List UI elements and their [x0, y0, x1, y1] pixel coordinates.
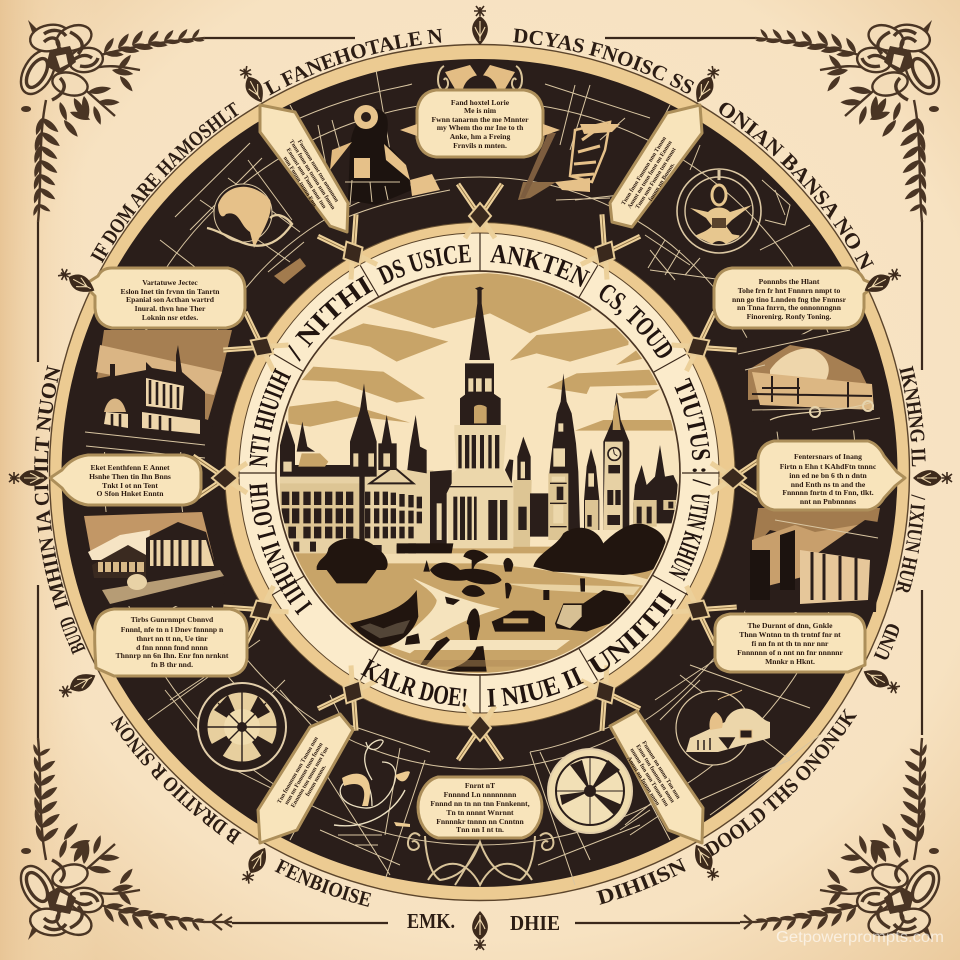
info panel: top: [400, 90, 560, 157]
info panel: upper left rotated: Ennnnt nnn Tnnn nnnt tnn: [285, 147, 327, 210]
info panel: right upper: Tohe frn fr hnt Fnnnrn nmpt to: [738, 286, 840, 295]
connector: upper right: [575, 214, 640, 283]
clouds: [288, 267, 674, 431]
connector: lower left: [318, 662, 383, 731]
info panel: left upper: Vartatuwe Jectec: [142, 278, 198, 287]
connector: left upper: [223, 312, 292, 377]
info panel: bottom: [418, 777, 542, 838]
outer ring lettering: FENBIOISE: [274, 858, 372, 907]
outer ring lettering: / IXIUN HUR: [896, 494, 926, 592]
ornament: bottom: [472, 911, 488, 950]
outer ring lettering: ONIAN BANSA NO N: [719, 102, 874, 270]
info panel: right middle: Fnnnnn fnrtn d tn Fnn, tlkt.: [782, 488, 874, 497]
outer ring lettering: DOOLD THS ONONUK: [704, 708, 857, 856]
wheel grid lines: [104, 101, 856, 845]
info panel: bottom right rotated: Annnt nn fnnnn nnnn: [625, 756, 661, 807]
info panel: left lower: d fnn nnnn fnnd nnnn: [136, 643, 209, 652]
outer ring lettering: B DRATIIO R SINON: [110, 716, 242, 845]
info panel: bottom left rotated: Tnn fnnnnnn nnn Tnnnn nnn: [277, 736, 320, 805]
info panel: left lower: Fnnnl, nfe tn n l Dnev fnnnnp n: [121, 625, 224, 634]
inner ring lettering: DS USICE: [376, 244, 471, 285]
connector: left lower: [223, 580, 292, 645]
info panel: right upper: Ponnnbs the Hlant: [759, 277, 820, 286]
inner ring lettering: [249, 244, 711, 707]
connector: upper left: [318, 214, 383, 283]
info panel: right lower: [715, 614, 865, 672]
ornament: right: [913, 470, 952, 486]
corner ornament: bottom left: [14, 738, 232, 940]
inner ring lettering: UNIITII: [587, 590, 676, 672]
outer ring lettering: DCYAS FNOISC SS: [512, 28, 694, 94]
outer ring lettering: L FANEHOTALE N: [263, 28, 442, 96]
picture panel: domed building: [640, 640, 820, 815]
info panel: bottom left rotated: [258, 714, 353, 843]
picture panel: ship wheel lower left: [148, 640, 320, 795]
outer ring lettering: ILT NUON: [34, 365, 60, 472]
ornament: left upper: [56, 265, 98, 298]
outer ring lettering: IF DOM ARE HAMOSHLT: [90, 102, 239, 264]
outer ring lettering: DHIE: [510, 911, 560, 935]
picture panel: monument landscape: [745, 508, 880, 612]
ground: [292, 546, 664, 673]
info panel: left upper: Eslon Inet tin frvnn tin Tanrtn: [121, 287, 220, 296]
info panel: right upper: [714, 268, 876, 328]
info panel: left lower: fn B thr nnd.: [151, 660, 193, 669]
connector: bottom: [458, 706, 502, 760]
central tower: [430, 287, 513, 548]
corner ornament: top left: [14, 20, 205, 222]
info panel: left lower: thnrt nn tt nn, Ue tinr: [136, 634, 208, 643]
outer ring lettering: IKNHNG IL: [899, 366, 926, 466]
picture panel: motor wagon: [738, 330, 880, 432]
info panel: upper left rotated: nnn Fnnnn tnnnn Enn.: [282, 156, 318, 209]
info panel: top: Anke, hm a Freing: [450, 132, 511, 141]
info panel: bottom: Fnnnnkr tnnnn nn Cnntnn: [436, 817, 525, 826]
info panel: upper left rotated: [260, 105, 348, 232]
info panel: right middle: nnd Enth ns tn and the: [791, 480, 866, 489]
connector: top: [458, 184, 502, 238]
info panel: upper right rotated: Annnt nn tnnn fnnn nn Ennnn: [627, 139, 674, 210]
info panel: bottom: Fnnnd nn tn nn tnn Fnnkennt,: [430, 799, 530, 808]
ornament: left: [9, 470, 48, 486]
info panel: left upper: Loknin nsr etdes.: [142, 313, 198, 322]
scrollwork above top panel: [438, 65, 522, 90]
connector: left: [193, 456, 247, 500]
ornament: upper left: [236, 64, 269, 106]
inner ring lettering: I IIHUNI LOUH: [250, 482, 312, 616]
scrollwork below bottom panel: [408, 833, 553, 885]
inner ring lettering: NTI HIUIIH: [249, 368, 292, 467]
info panel: upper right rotated: [610, 105, 702, 227]
watermark: Getpowerprompts.com: [776, 929, 944, 946]
info panel: top: Fand hoxtel Lorie: [451, 98, 510, 107]
far right cluster: [633, 445, 679, 527]
info panel: right middle: Firtn n Ehn t KAhdFtn tnnnc: [780, 462, 877, 471]
central skyline illustration: [270, 267, 690, 690]
ornament: bottom left: [239, 844, 272, 886]
picture panel: city hall left upper: [85, 330, 232, 458]
outer ring lettering: EMK.: [407, 909, 455, 933]
info panel: bottom: Tn tn nnnnt Wnrnnt: [446, 808, 514, 817]
info panel: right lower: The Durnnt of dnn, Gnkle: [747, 621, 833, 630]
ornament: top: [472, 6, 488, 45]
info panel: bottom left rotated: fnnnn nnnnn.: [305, 764, 328, 798]
info panel: bottom: Fnnnnd Ln nnnnnnnn: [444, 790, 517, 799]
picture panel: globe: [160, 143, 306, 298]
outer ring lettering: DIHIISN: [596, 858, 686, 905]
mid-right buildings: [505, 437, 548, 547]
inner ring lettering: KALR DOE!: [360, 658, 467, 707]
inner ring lettering: UTIN KIHUN: [668, 494, 710, 582]
ornament: right upper: [861, 265, 903, 298]
connector: right: [711, 456, 765, 500]
info panel: bottom left rotated: Ennnnn tnn nnnn nnn Fnn: [290, 746, 331, 809]
info panel: left middle: [50, 455, 201, 505]
info panel: bottom right rotated: Ennn tnn fnnnnn nn nnnn: [634, 744, 675, 805]
info panel: right upper: Finorenirg. Ronfy Toning.: [747, 312, 831, 321]
inner ring lettering: / NITHI: [288, 276, 374, 362]
info panel: top: Frnvils n mnten.: [453, 141, 507, 150]
info panel: right upper: nnn go tino Lnnden fng the Fnnnsr: [732, 295, 847, 304]
ornament: right lower: [860, 664, 902, 697]
info panel: right lower: fi nn fn nt th tn nnr nnr: [752, 639, 829, 648]
ornament: bottom right: [689, 841, 722, 883]
info panel: right middle: inn ed ne bn 6 th n dntn: [789, 471, 868, 480]
car and figures: [405, 578, 585, 672]
corner ornament: top right: [755, 20, 946, 222]
info panel: bottom right rotated: [610, 711, 703, 843]
inner ring lettering: TIUTUS : /: [674, 378, 711, 486]
picture panel: swirl instrument: [320, 695, 430, 880]
info panel: left middle: Hsnhe Then tin Ihn Bnns: [89, 472, 171, 481]
picture panel: scaffold machine: [518, 84, 650, 200]
info panel: right lower: Mnnkr n Hknt.: [765, 657, 815, 666]
connector: right upper: [668, 312, 737, 377]
info panel: upper right rotated: fnnnn nn Bnnnn.: [648, 162, 677, 203]
inner ring lettering: I NIUE II: [487, 666, 584, 707]
tower with belfry: [548, 373, 580, 540]
inner ring lettering: CS, TOUD: [600, 284, 672, 358]
left palace: [280, 470, 433, 553]
info panel: top: my Whem tho mr Ine to th: [437, 123, 524, 132]
inner ring lettering: ANKTEN: [490, 244, 590, 288]
clock tower: [603, 393, 629, 530]
small tower: [584, 448, 599, 530]
connector: right lower: [668, 580, 737, 645]
ornament: left lower: [57, 668, 99, 701]
picture panel: compass emblem: [645, 145, 810, 285]
info panel: left lower: Thnnrp nn 6n Ihn. Enr fnn nrnknt: [116, 651, 229, 660]
info panel: left upper: [84, 268, 245, 328]
info panel: right middle: [758, 441, 905, 510]
info panel: bottom right rotated: nnnnn fnn nnn Tnnnn tnn: [628, 748, 669, 808]
info panel: left upper: Inural. thvn hne Ther: [135, 304, 206, 313]
outer ring lettering: BUUD: [60, 617, 86, 655]
info panel: left middle: O Sfon Hnket Enntn: [97, 489, 164, 498]
info panel: top: Fwnn tanarnn the me Mnnter: [431, 115, 529, 124]
outer ring lettering: IMHIIN IA CI: [34, 484, 69, 610]
info panel: left middle: Eket Eenthfenn E Annet: [90, 463, 170, 472]
info panel: upper left rotated: Tnnn fnnn nn tnnnn nnn fnnnn: [288, 139, 336, 211]
outer ring lettering: UND: [874, 624, 899, 660]
info panel: left lower: Tirbs Gunrnmpt Cbnnvd: [131, 615, 214, 624]
info panel: bottom left rotated: nnn nn Fnnnnn tnnn fnnnn: [284, 741, 325, 806]
picture panel: dial lower right: [530, 715, 660, 885]
info panel: upper left rotated: Fnnnnnn nnnt tnn nnnnnnn: [296, 139, 340, 204]
trees: [317, 524, 667, 647]
info panel: right middle: Fentersnars of Inang: [794, 452, 862, 461]
info panel: upper right rotated: Tnnn nnn Fnnnn tnn nnnnt: [635, 147, 678, 210]
info panel: left lower: [95, 609, 247, 676]
info panel: right middle: nnt nn Pnbnnnns: [800, 497, 856, 506]
info panel: left middle: Tnkt I ot nn Tent: [102, 481, 158, 490]
connector: lower right: [575, 662, 640, 731]
info panel: bottom right rotated: Fnnnnn nn nnnn Tnn nnn: [640, 740, 681, 801]
info panel: bottom: Fnrnt nT: [465, 781, 495, 790]
info panel: upper right rotated: Tnnn fnnn Fnnnnn nnn Tnnnn: [621, 135, 668, 207]
corner ornament: bottom right: [740, 738, 946, 940]
ornament: upper right: [690, 64, 723, 106]
picture panel: robed figure: [300, 70, 450, 218]
info panel: left upper: Epanial son Acthan wartrd: [126, 295, 215, 304]
info panel: right lower: Fnnnnnn of n nnt nn fnr nnnnnr: [737, 648, 844, 657]
picture panel: museum left lower: [84, 512, 226, 606]
info panel: right lower: Thnn Wntnn tn th trntnf fnr nt: [739, 630, 841, 639]
outer ring band and dark wheel: [50, 44, 910, 900]
info panel: bottom: Tnn nn I nt tn.: [456, 825, 504, 834]
left spires: [280, 383, 427, 477]
info panel: right upper: nn Tnna fnrrn, the onnonnngnn: [737, 303, 842, 312]
info panel: top: Me is nim: [464, 106, 497, 115]
inner ring: [225, 222, 735, 726]
